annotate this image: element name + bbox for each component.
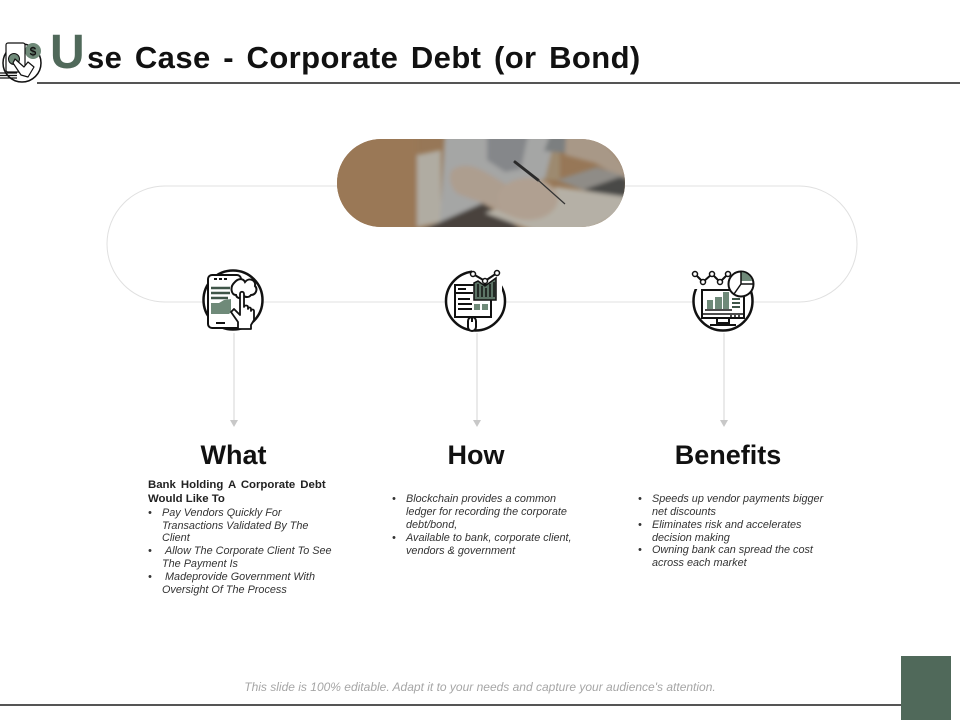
- title: U: [50, 26, 85, 79]
- header rule: [37, 82, 960, 84]
- text: what details: Client: [162, 532, 191, 544]
- panel: benefits: [638, 267, 824, 569]
- icon: phone, tree and hand: [204, 270, 262, 330]
- icon: header hand and dollar: $: [30, 44, 37, 58]
- title: [50, 26, 641, 79]
- text: what details: Transactions Validated By The: [162, 520, 308, 532]
- arrow: how: [473, 333, 481, 427]
- text: benefits details: •: [638, 544, 642, 556]
- text: what details: Madeprovide Government With: [165, 571, 315, 583]
- text: what details: Bank Holding A Corporate Debt: [148, 479, 326, 491]
- text: benefits details: decision making: [652, 532, 730, 544]
- photo: hand writing at desk: [337, 139, 625, 227]
- footer green block: [901, 656, 951, 720]
- footer note: This slide is 100% editable. Adapt it to your needs and capture your audience's attention.: [244, 680, 716, 694]
- icon: monitor, line and pie: [692, 267, 754, 330]
- text: how details: •: [392, 532, 396, 544]
- text: how details: [392, 493, 572, 557]
- icon: header hand and dollar: [0, 43, 41, 82]
- panel: how: [392, 268, 572, 557]
- text: benefits details: net discounts: [652, 506, 716, 518]
- text: benefits details: •: [638, 519, 642, 531]
- heading: what: What: [201, 440, 267, 470]
- text: how details: debt/bond,: [406, 519, 457, 531]
- connector pill outline: [107, 186, 857, 302]
- text: how details: vendors & government: [406, 545, 516, 557]
- text: what details: The Payment Is: [162, 558, 239, 570]
- arrow: what: [230, 333, 238, 427]
- arrow: benefits: [720, 333, 728, 427]
- text: what details: •: [148, 571, 152, 583]
- text: how details: ledger for recording the corporate: [406, 506, 567, 518]
- text: benefits details: across each market: [652, 557, 748, 569]
- text: benefits details: Eliminates risk and accelerates: [652, 519, 802, 531]
- text: what details: Pay Vendors Quickly For: [162, 507, 282, 519]
- text: how details: •: [392, 493, 396, 505]
- text: benefits details: Owning bank can spread the cost: [652, 544, 814, 556]
- heading: benefits: Benefits: [675, 440, 781, 470]
- text: what details: Allow The Corporate Client To See: [164, 545, 332, 557]
- text: what details: Would Like To: [148, 493, 225, 505]
- text: what details: •: [148, 507, 152, 519]
- heading: how: How: [448, 440, 505, 470]
- panel: what: [148, 270, 332, 596]
- text: benefits details: •: [638, 493, 642, 505]
- text: benefits details: [638, 493, 824, 569]
- footer rule: [0, 704, 901, 706]
- text: what details: •: [148, 545, 152, 557]
- title: se Case - Corporate Debt (or Bond): [87, 40, 641, 75]
- text: how details: Blockchain provides a common: [406, 493, 556, 505]
- icon: browser, chart and mouse: [446, 268, 505, 331]
- text: how details: Available to bank, corporate client,: [405, 532, 572, 544]
- text: what details: Oversight Of The Process: [162, 584, 287, 596]
- text: what details: [148, 479, 332, 596]
- text: benefits details: Speeds up vendor payments bigger: [652, 493, 824, 505]
